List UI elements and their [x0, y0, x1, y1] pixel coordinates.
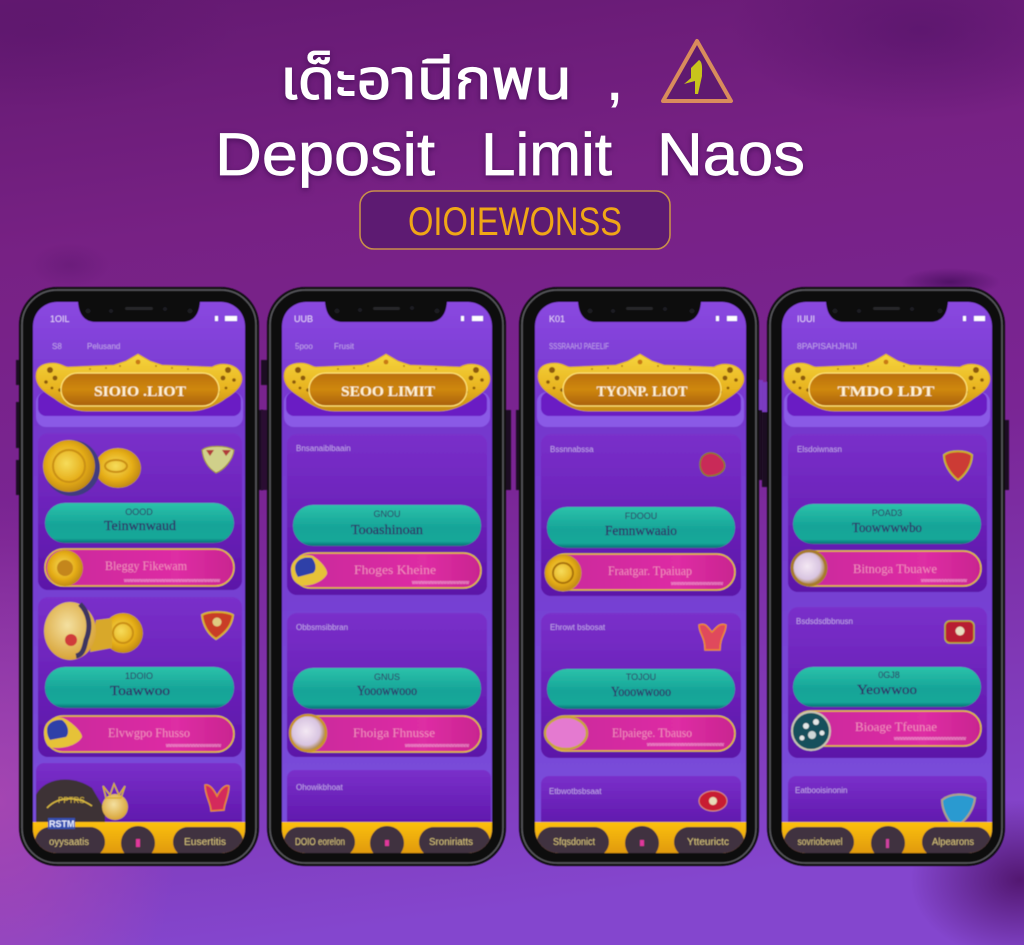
teal button: Yeowwoo: [857, 683, 917, 698]
pink button: [545, 554, 735, 591]
phone 3 notch: [578, 302, 701, 322]
title: comma: ,: [608, 58, 621, 111]
title: Deposit Limit Naos: Limit: [481, 121, 612, 188]
phone 3 card 2: [541, 613, 741, 758]
icon: red stone: [699, 791, 727, 811]
pink button: [290, 715, 481, 752]
phone 2 status bar: 5poo: [295, 342, 313, 351]
phone 2 bottom navigation: DOIO eorelon: [295, 837, 345, 848]
pink button: Bleggy Fikewam: [105, 558, 187, 573]
phone 2 card 2: [287, 613, 487, 757]
subtitle badge: [360, 191, 670, 249]
phone 2 card 3: [286, 770, 492, 823]
title: Deposit Limit Naos: [215, 121, 805, 188]
title: Deposit Limit Naos: Naos: [657, 121, 805, 188]
phone 2 status bar: [294, 314, 483, 351]
pink button: Elpaiege. Tbauso: [612, 725, 692, 740]
phone 3 card 1: [541, 434, 741, 596]
phone 2 card 3: Ohowikbhoat: [296, 783, 343, 792]
teal button: 1DOIO: [125, 671, 153, 681]
pink button: Bioage Tfeunae: [855, 719, 937, 734]
phone 4 card 2: [788, 607, 987, 758]
phone 3 card 3: [541, 776, 741, 832]
pink button: Fhoiga Fhnusse: [353, 725, 435, 740]
phone 4 frame: [762, 287, 1009, 866]
phone 3 bottom navigation: Ytteurictc: [687, 837, 729, 848]
phone 4 card 2: Bsdsdsdbbnusn: [796, 617, 853, 626]
phone 2 status bar: Frusit: [334, 342, 355, 351]
icon: gem: [202, 446, 234, 473]
teal button: [293, 668, 481, 709]
title: Thai line: เด็ะอานีกพน: [280, 48, 572, 111]
phone 1 status bar: Pelusand: [87, 342, 120, 351]
phone 3 card 3: Etbwotbsbsaat: [549, 787, 602, 796]
icon: dark burger with crown: PPTRS: [58, 796, 85, 805]
pink button: wwwwwwwwwwwwwwwwww: [671, 581, 723, 587]
phone 4 status bar: 8PAPISAHJHIJI: [797, 342, 857, 351]
phone 1 status bar: 1OIL: [50, 314, 70, 324]
pink button: Fhoges Kheine: [354, 562, 436, 577]
phone 4 gold banner: [784, 354, 990, 411]
phone 1 bottom navigation: Eusertitis: [184, 837, 226, 848]
phone 4 card 3: [788, 776, 987, 832]
phone 4 header panel: [784, 392, 990, 427]
phone 2 gold banner: [284, 354, 490, 411]
teal button: Femnwwaaio: [605, 524, 677, 539]
teal button: GNUS: [374, 672, 400, 682]
phone 3 gold banner: TYONP. LIOT: [596, 384, 688, 400]
phone 4 card 1: Elsdoiwnasn: [797, 445, 842, 454]
title: Deposit Limit Naos: Deposit: [215, 121, 435, 188]
teal button: [293, 505, 481, 546]
phone 4 card 3: Eatbooisinonin: [795, 786, 847, 795]
pink button: [44, 716, 234, 752]
teal button: GNOU: [374, 509, 400, 519]
phone 1 bottom navigation: [32, 821, 246, 854]
phone 2 card 1: Bnsanaiblbaain: [296, 444, 351, 453]
teal button: Teinwnwaud: [104, 519, 176, 534]
phone 4 bottom navigation: sovriobewel: [798, 837, 842, 848]
phone 3 status bar: [549, 314, 737, 351]
teal button: [45, 503, 234, 543]
phone 1 header panel: [36, 392, 243, 427]
pink button: wwwwwwwwwwwwwwwwww: [412, 580, 469, 586]
phone 2 bottom navigation: Sroniriatts: [429, 837, 473, 848]
phone 3 status bar: SSSRAAHJ PAEELIF: [549, 342, 609, 351]
phone 2 header panel: [284, 392, 490, 427]
phone 3 header panel: [537, 392, 744, 427]
icon: ruby: [700, 453, 725, 476]
teal button: 0GJ8: [878, 670, 900, 680]
pink button: wwwwwwwwwwwwwwwwwwwwww: [405, 743, 469, 749]
teal button: [793, 667, 981, 707]
phone 1 frame: [16, 287, 263, 866]
teal button: [45, 667, 234, 708]
teal button: Yooowwooo: [357, 684, 417, 699]
phone 1 gold banner: [36, 354, 242, 411]
icon: blue gem: [942, 794, 975, 824]
pink button: wwwwwwwwwwwwwwwwwwwwwwwwww: [647, 742, 724, 748]
pink button: Bitnoga Tbuawe: [853, 561, 937, 576]
phone 1 notch: [78, 302, 200, 322]
phone 4 status bar: [797, 314, 985, 351]
pink button: [792, 711, 981, 750]
pink button: Elvwgpo Fhusso: [108, 725, 190, 740]
pink button: Fraatgar. Tpaiuap: [608, 563, 692, 578]
teal button: TOJOU: [626, 672, 656, 682]
icon: cookie and coin: [44, 602, 143, 660]
phone 4 gold banner: TMDO LDT: [838, 384, 934, 400]
phone 3 frame: [516, 287, 763, 866]
phone 3 card 1: Bssnnabssa: [550, 445, 594, 454]
phone 1: [16, 287, 263, 866]
icon: gold coins: [43, 440, 141, 496]
phone 1 status bar: S8: [52, 342, 62, 351]
teal button: [793, 504, 981, 544]
phone 2 frame: [261, 287, 511, 866]
phone 3 status bar: K01: [549, 314, 565, 324]
pink button: wwwwwwwwwwwwwwwwwwwwwwww: [894, 736, 966, 742]
teal button: FDOOU: [625, 511, 657, 521]
phone 4: [762, 287, 1009, 866]
subtitle badge: OIOIEWONSS: [408, 200, 622, 244]
phone 1 card 1: [38, 433, 242, 590]
phone 4 status bar: IUUI: [797, 314, 815, 324]
phone 2 card 1: [287, 434, 487, 595]
phone 3 bottom navigation: [535, 822, 746, 860]
icon: orange Y trophy: [699, 624, 726, 650]
phone 2 notch: [325, 302, 447, 322]
phone 2 card 2: Obbsmsibbran: [296, 623, 348, 632]
phone 4 bottom navigation: Alpearons: [932, 837, 974, 848]
phone 1 card 3: [36, 763, 242, 823]
phone 1 gold banner: SIOIO .LIOT: [94, 384, 186, 400]
pink button: [45, 549, 234, 586]
teal button: [547, 669, 735, 709]
phone 4 bottom navigation: [782, 822, 992, 860]
teal button: OOOD: [125, 507, 153, 517]
icon: burger badge: RSTM: [49, 819, 74, 829]
phone 3: [516, 287, 763, 866]
pink button: wwwwwwwwwwwwwwwwww: [166, 743, 221, 749]
teal button: [547, 507, 735, 548]
phone 2 status bar: UUB: [294, 314, 313, 324]
icon: red square gem: [945, 621, 974, 643]
icon: warning triangle with bolt: [663, 41, 731, 101]
phone 2: [261, 287, 511, 866]
pink button: [291, 553, 481, 588]
phone 3 card 2: Ehrowt bsbosat: [550, 623, 606, 632]
phone 3 bottom navigation: Sfqsdonict: [553, 837, 595, 848]
icon: dark burger with crown: [36, 779, 129, 823]
icon: red Y: [205, 785, 229, 811]
pink button: wwwwwwwwwwwwwwwwwwwwwwwwwwwwww: [124, 578, 220, 584]
pink button: [792, 551, 981, 586]
icon: strawberry gem: [944, 451, 972, 480]
teal button: Toowwwwbo: [852, 521, 922, 536]
phone 2 bottom navigation: [281, 821, 493, 854]
phone 1 card 2: [38, 597, 242, 757]
phone 2 gold banner: SEOO LIMIT: [341, 384, 435, 400]
pink button: wwwwwwwwwwwwwww: [921, 578, 967, 584]
phone 3 gold banner: [538, 354, 744, 411]
teal button: Yooowwooo: [611, 685, 671, 700]
icon: gem: [202, 612, 233, 639]
phone 4 card 1: [788, 434, 987, 592]
pink button: [545, 716, 735, 751]
teal button: Toawwoo: [110, 684, 170, 699]
phone 1 status bar: [50, 314, 237, 351]
phone 1 bottom navigation: oyysaatis: [49, 837, 89, 848]
phone 4 notch: [826, 302, 948, 322]
teal button: Tooashinoan: [351, 523, 423, 538]
teal button: POAD3: [872, 508, 902, 518]
